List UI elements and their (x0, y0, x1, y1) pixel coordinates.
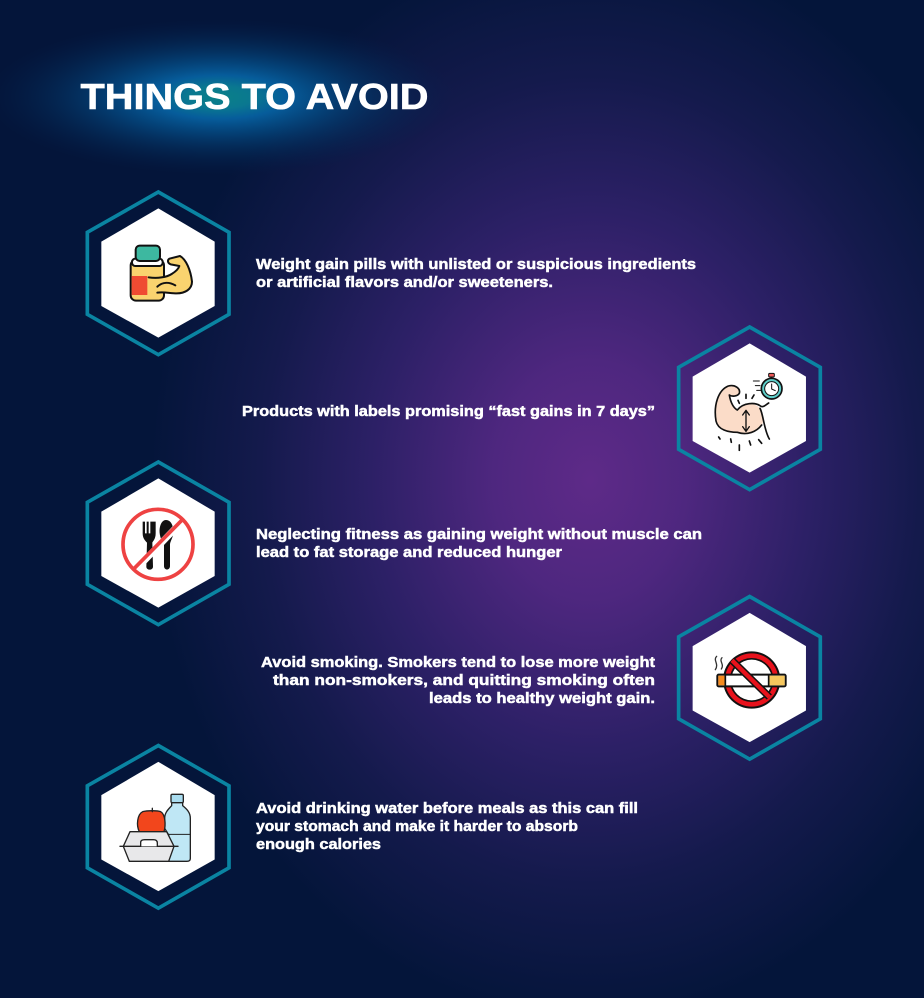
icon: flexed arm with stopwatch (715, 373, 782, 450)
panel: water before meals (87, 745, 638, 908)
icon: food box, apple and water bottle (120, 794, 190, 861)
description: lead to fat storage and reduced hunger (256, 544, 562, 561)
description: Products with labels promising “fast gains in 7 days” (242, 403, 655, 420)
description: than non-smokers, and quitting smoking often (273, 672, 655, 689)
panel: avoid smoking (261, 596, 820, 759)
icon: no smoking sign (715, 651, 786, 709)
hexagon frame (87, 745, 229, 908)
icon: pill bottle with muscle arm (131, 246, 192, 301)
description: Avoid drinking water before meals as this can fill (256, 800, 638, 817)
description: enough calories (256, 836, 381, 853)
title: THINGS TO AVOID (80, 76, 428, 117)
description: Avoid smoking. Smokers tend to lose more weight (261, 654, 655, 671)
description: or artificial flavors and/or sweeteners. (256, 274, 553, 291)
hexagon frame (87, 192, 229, 355)
description: Neglecting fitness as gaining weight without muscle can (256, 526, 702, 543)
hexagon frame (679, 596, 820, 759)
description (256, 256, 696, 291)
description: Weight gain pills with unlisted or suspicious ingredients (256, 256, 696, 273)
panel: weight gain pills (87, 192, 696, 355)
description: your stomach and make it harder to absorb (256, 818, 578, 835)
icon: crossed-out fork and knife (123, 509, 193, 579)
description (256, 800, 638, 853)
panel: neglecting fitness (87, 462, 702, 625)
hexagon frame (679, 327, 820, 490)
description (256, 526, 702, 561)
description: leads to healthy weight gain. (429, 690, 655, 707)
panel: fast gains labels (242, 327, 820, 490)
hexagon frame (87, 462, 229, 625)
description (261, 654, 655, 707)
